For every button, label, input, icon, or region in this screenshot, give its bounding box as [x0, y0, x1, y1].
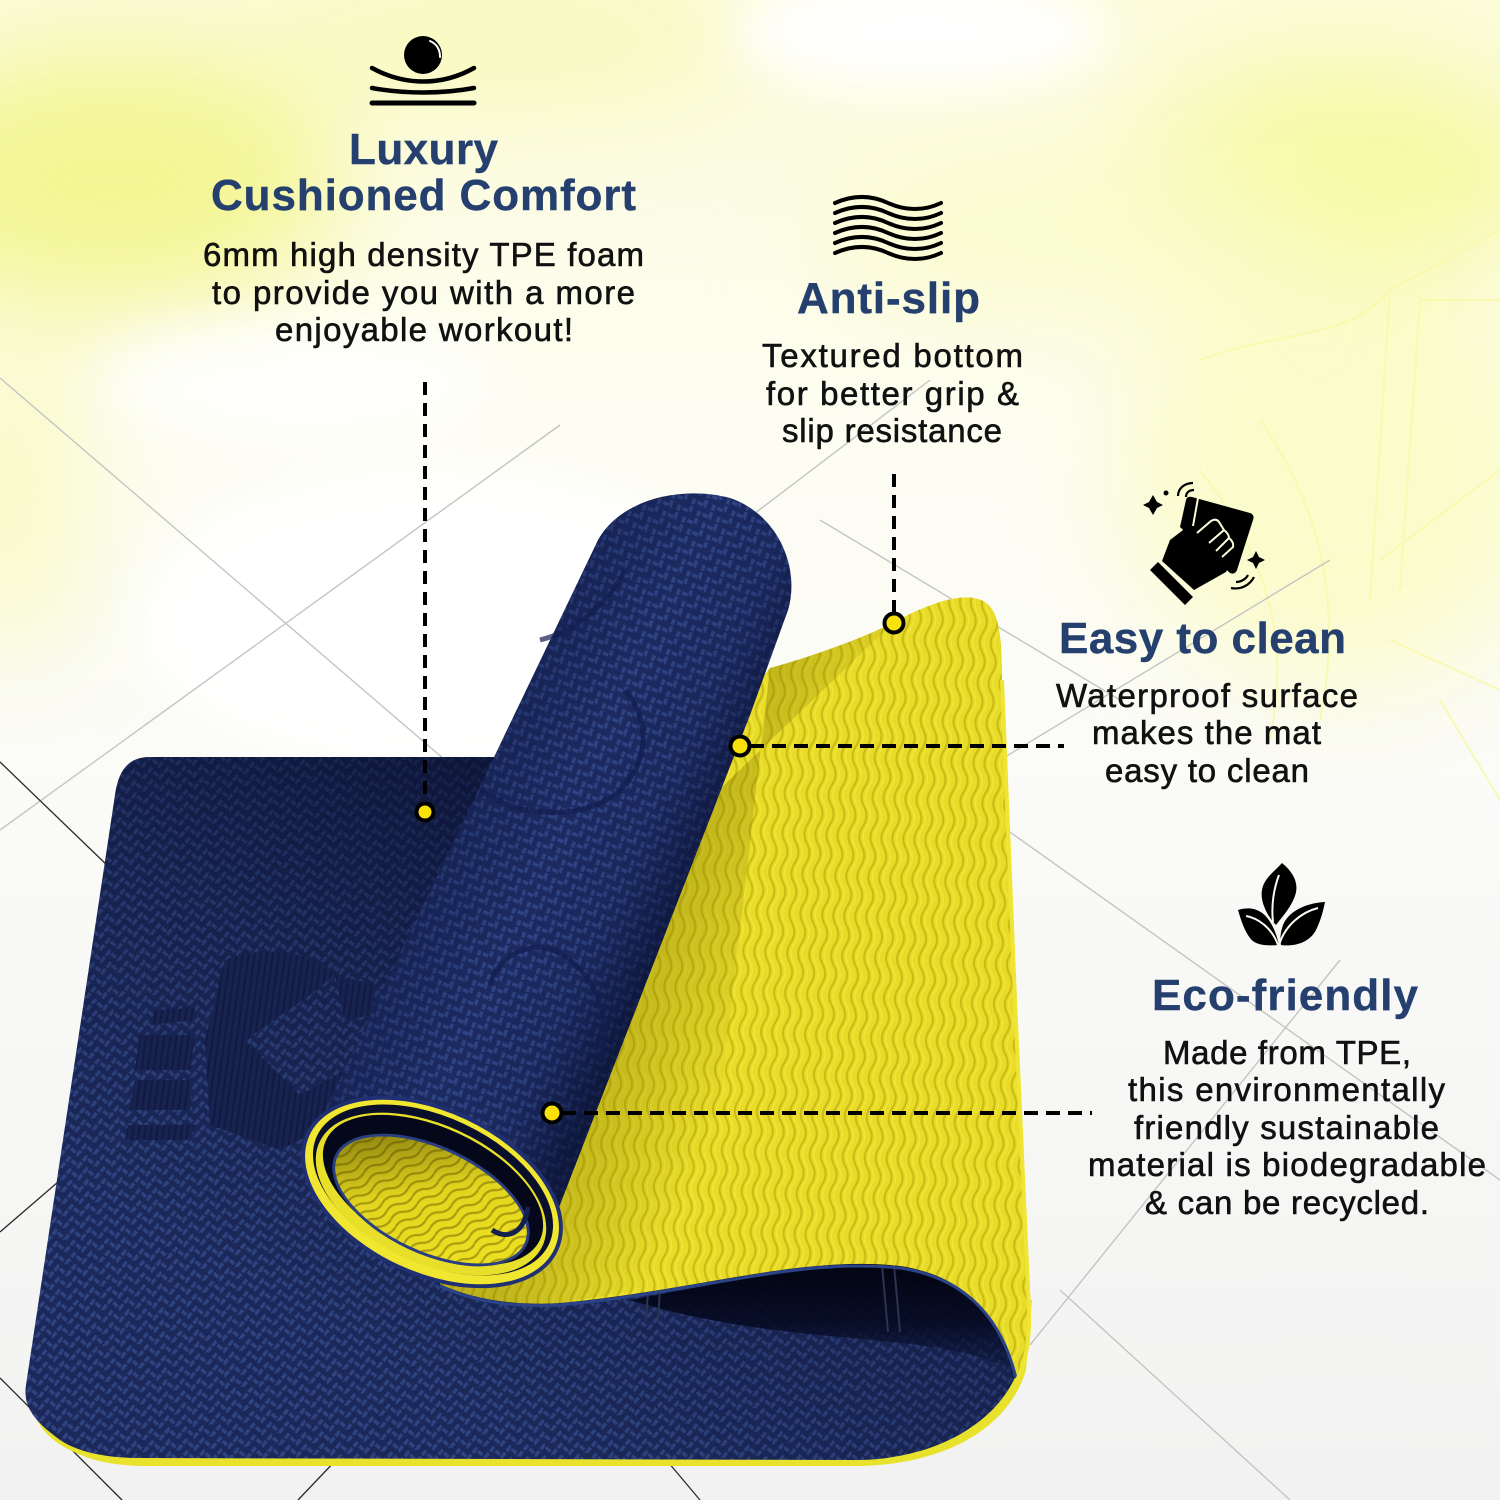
faint mandala lines: [1200, 230, 1500, 800]
text block: for better grip &: [766, 375, 1019, 412]
roll embossed marks: [480, 570, 643, 1060]
icon: waves: [835, 197, 941, 259]
flat mat yellow rim: [30, 1280, 1032, 1466]
sheet right highlight: [1002, 680, 1029, 1380]
navy edge of yellow sheet: [440, 1266, 1016, 1378]
text block: Textured bottom: [762, 337, 1023, 374]
callout: easy to clean: [730, 736, 1064, 756]
roll spiral end: [271, 1057, 593, 1327]
mat interior shadow: [630, 1263, 1016, 1376]
straps under the sheet: [646, 1265, 900, 1332]
mat logo: [125, 952, 375, 1150]
text block: [1056, 677, 1358, 789]
heading: [211, 125, 636, 220]
text block: & can be recycled.: [1145, 1184, 1429, 1221]
text block: [203, 236, 644, 348]
heading: Anti-slip: [797, 274, 980, 323]
text block: slip resistance: [782, 412, 1002, 449]
text block: to provide you with a more: [212, 274, 635, 311]
text block: this environmentally: [1128, 1071, 1446, 1108]
text block: Made from TPE,: [1163, 1034, 1411, 1071]
heading: Easy to clean: [1059, 614, 1346, 663]
icon: hand wiping: [1143, 483, 1265, 605]
flat mat surface: [25, 757, 1020, 1460]
icon: leaves: [1238, 863, 1325, 945]
yellow underside of mat: [440, 597, 1029, 1380]
callout lines and dots: [416, 382, 1092, 1122]
feature: luxury cushioned comfort: [203, 36, 644, 348]
heading: Eco-friendly: [1152, 971, 1419, 1020]
heading: Luxury: [349, 125, 499, 174]
text block: enjoyable workout!: [275, 311, 573, 348]
icon: ball on foam: [372, 36, 474, 103]
rolled mat: [271, 493, 791, 1327]
flat mat: [25, 757, 1032, 1466]
text block: [1088, 1034, 1486, 1221]
feature: eco-friendly: [1088, 863, 1486, 1221]
callout: anti-slip: [884, 474, 904, 632]
roll body: [306, 493, 791, 1270]
floor tile lines: [0, 378, 1500, 1500]
callout: eco-friendly: [542, 1104, 1092, 1122]
text block: easy to clean: [1105, 752, 1309, 789]
spiral tail: [492, 1207, 528, 1235]
text block: makes the mat: [1092, 714, 1321, 751]
text block: friendly sustainable: [1134, 1109, 1439, 1146]
text block: Waterproof surface: [1056, 677, 1358, 714]
text block: [762, 337, 1023, 449]
feature: easy to clean: [1056, 483, 1358, 789]
feature: anti-slip: [762, 197, 1023, 449]
callout: luxury cushioned comfort: [416, 382, 434, 820]
text block: material is biodegradable: [1088, 1146, 1486, 1183]
heading: Cushioned Comfort: [211, 171, 636, 220]
text block: 6mm high density TPE foam: [203, 236, 644, 273]
